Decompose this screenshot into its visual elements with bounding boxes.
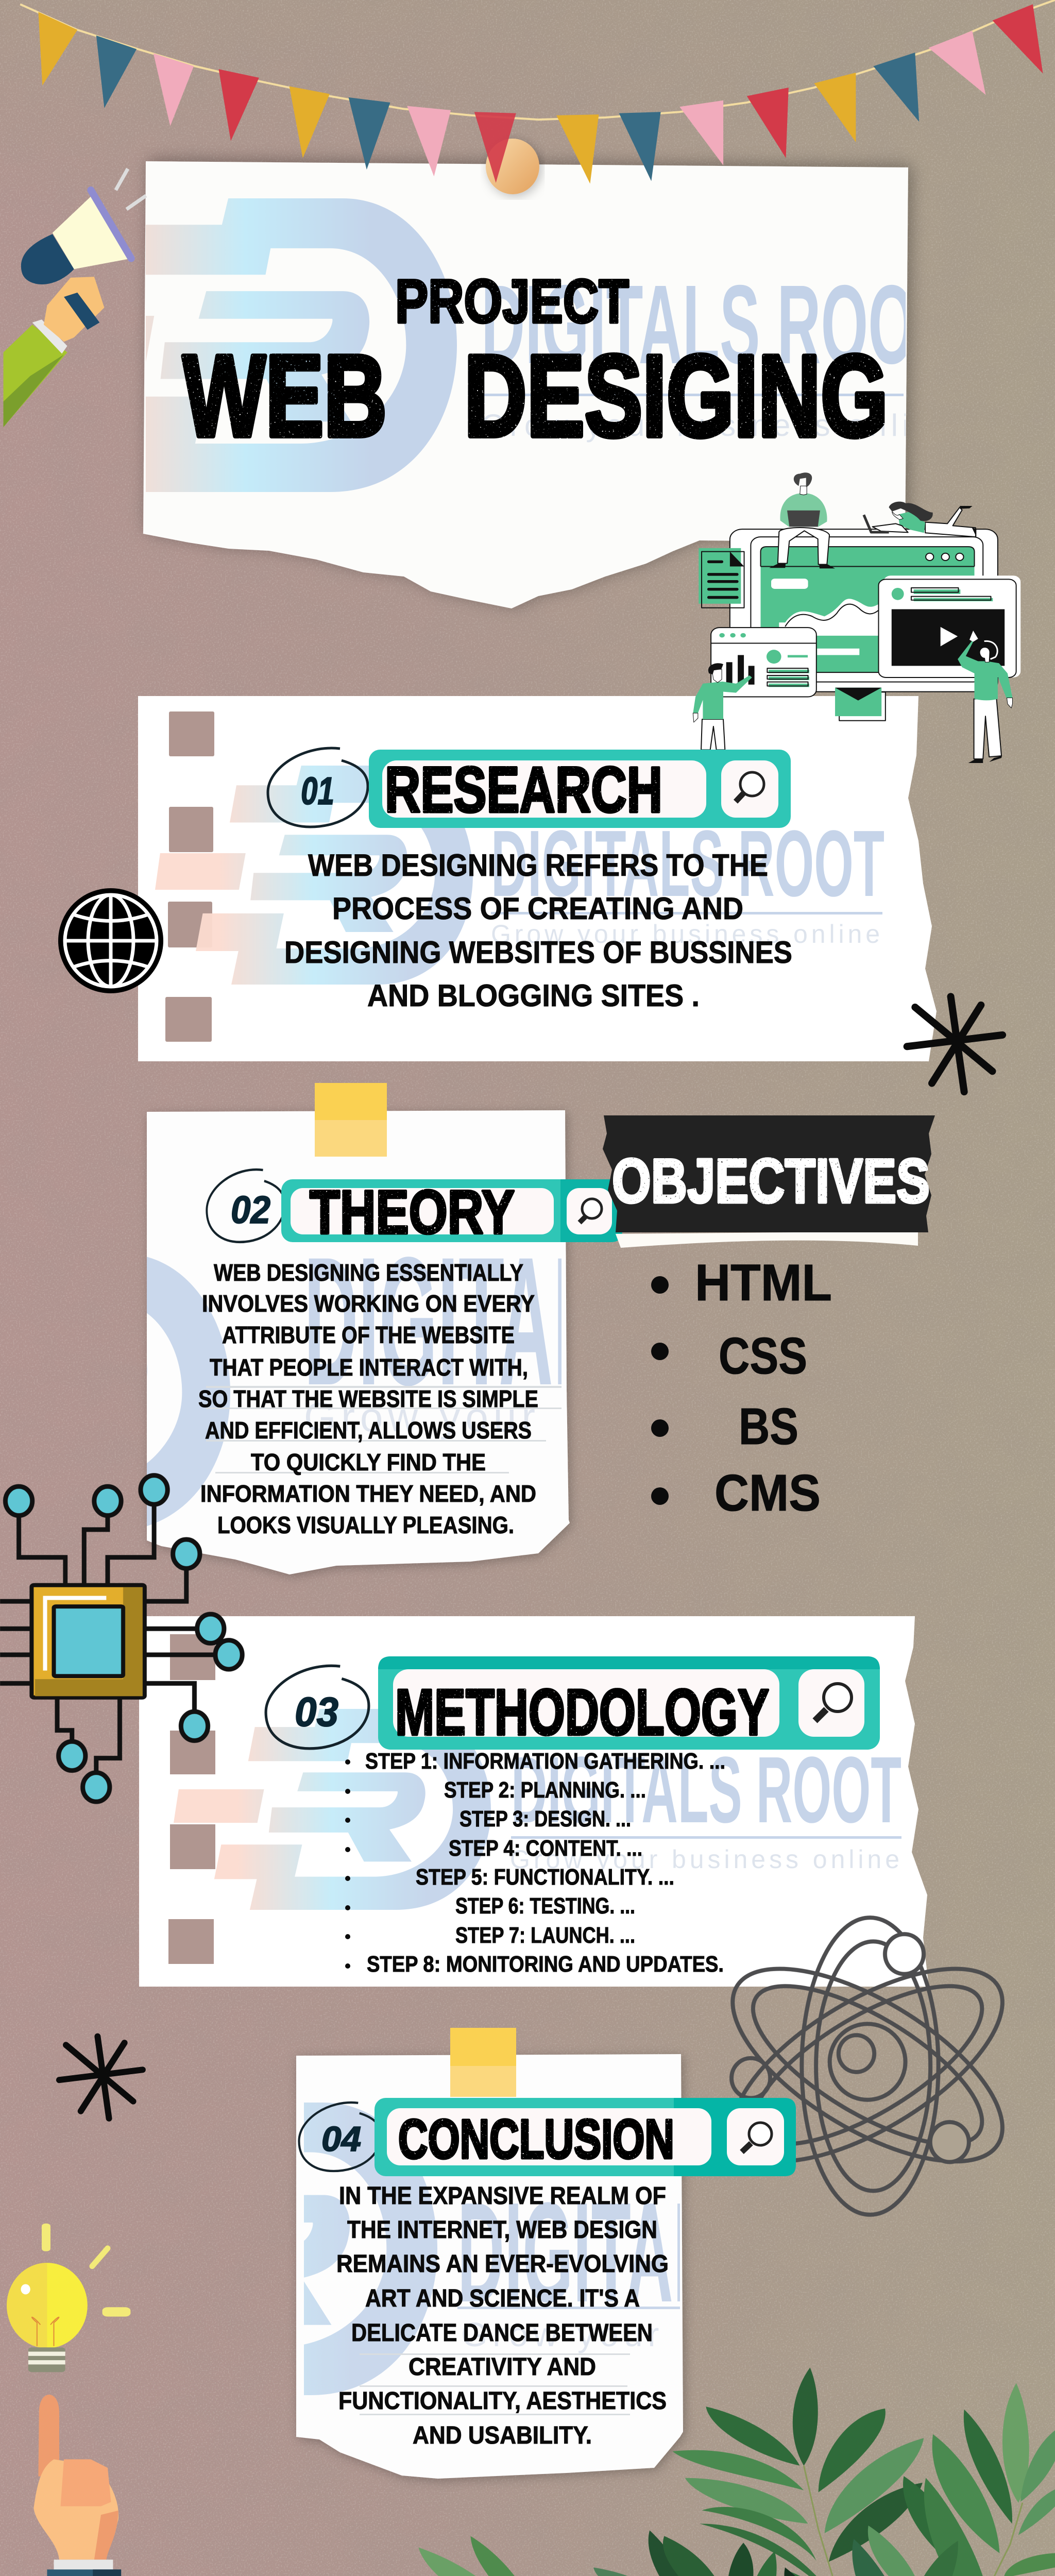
text: theory body: WEB DESIGNING ESSENTIALLY bbox=[214, 1259, 523, 1286]
heading text: objectives: OBJECTIVES bbox=[612, 1146, 930, 1216]
list: methodology steps: STEP 5: FUNCTIONALITY. ... bbox=[416, 1865, 674, 1890]
list: methodology steps: STEP 8: MONITORING AND UPDATES. bbox=[367, 1952, 724, 1977]
number: 04: 04 bbox=[321, 2120, 361, 2159]
panel: title paper bbox=[138, 150, 920, 613]
heading: theory bbox=[207, 1170, 622, 1247]
text: research body: PROCESS OF CREATING AND bbox=[332, 891, 743, 926]
title: web: WEB bbox=[183, 331, 387, 461]
search bar: theory bbox=[281, 1179, 622, 1242]
number: 02: 02 bbox=[231, 1188, 270, 1231]
text: research body: WEB DESIGNING REFERS TO THE bbox=[308, 848, 768, 883]
number circle: 01 bbox=[268, 748, 368, 827]
number circle: 04 bbox=[299, 2103, 381, 2171]
watermark: research logo: Grow your business online bbox=[491, 920, 880, 948]
text: theory body: LOOKS VISUALLY PLEASING. bbox=[217, 1512, 514, 1538]
text: theory body: TO QUICKLY FIND THE bbox=[251, 1449, 486, 1476]
text: theory body: SO THAT THE WEBSITE IS SIMPLE bbox=[198, 1385, 538, 1412]
heading text: research: RESEARCH bbox=[385, 754, 662, 826]
pin bbox=[486, 139, 539, 194]
text: research body bbox=[284, 848, 792, 1013]
text: conclusion body bbox=[336, 2182, 669, 2449]
list: methodology steps: STEP 4: CONTENT. ... bbox=[449, 1836, 642, 1861]
text: conclusion body: REMAINS AN EVER-EVOLVING bbox=[336, 2250, 669, 2278]
man right bbox=[958, 631, 1012, 763]
watermark: theory logo: Grow your bbox=[304, 1394, 540, 1440]
heading text: conclusion: CONCLUSION bbox=[398, 2108, 674, 2170]
text: theory body: THAT PEOPLE INTERACT WITH, bbox=[210, 1354, 528, 1381]
heading: methodology bbox=[266, 1656, 880, 1750]
list: objectives: HTML bbox=[695, 1254, 832, 1312]
icon: light bulb bbox=[7, 2224, 130, 2372]
text: conclusion body: IN THE EXPANSIVE REALM OF bbox=[339, 2182, 666, 2210]
text: conclusion body: FUNCTIONALITY, AESTHETICS bbox=[338, 2387, 667, 2415]
man left bbox=[693, 663, 752, 750]
list: methodology steps: STEP 7: LAUNCH. ... bbox=[455, 1923, 635, 1948]
list: methodology steps: STEP 1: INFORMATION GATHERING. ... bbox=[365, 1749, 725, 1774]
text: conclusion body: AND USABILITY. bbox=[413, 2422, 592, 2449]
search bar: methodology bbox=[378, 1656, 880, 1750]
list: methodology steps: STEP 3: DESIGN. ... bbox=[460, 1806, 631, 1832]
search bar: conclusion bbox=[375, 2098, 796, 2176]
text: theory body: AND EFFICIENT, ALLOWS USERS bbox=[205, 1417, 532, 1444]
panel: theory bbox=[0, 1110, 649, 1574]
number circle: 02 bbox=[207, 1170, 285, 1242]
banner: objectives bbox=[603, 1115, 935, 1248]
panel: methodology bbox=[139, 1616, 929, 1987]
chart window bbox=[711, 628, 816, 697]
icon: asterisk bottom bbox=[59, 2037, 143, 2119]
number circle: 03 bbox=[266, 1666, 369, 1749]
magnifier: methodology bbox=[815, 1684, 852, 1721]
watermark: theory logo bbox=[0, 1219, 649, 1532]
text: theory body: INVOLVES WORKING ON EVERY bbox=[202, 1290, 535, 1317]
text: conclusion body: CREATIVITY AND bbox=[409, 2353, 596, 2381]
person sitting bbox=[769, 472, 835, 568]
text: theory body: INFORMATION THEY NEED, AND bbox=[200, 1480, 536, 1507]
list: methodology steps bbox=[345, 1749, 725, 1977]
list: methodology steps: STEP 6: TESTING. ... bbox=[455, 1893, 635, 1919]
heading text: methodology: METHODOLOGY bbox=[395, 1676, 769, 1749]
icon: microchip bbox=[0, 1476, 242, 1802]
text: research body: AND BLOGGING SITES . bbox=[367, 978, 700, 1013]
title: project: PROJECT bbox=[395, 267, 629, 336]
number: 03: 03 bbox=[295, 1689, 338, 1735]
person lying bbox=[864, 502, 976, 537]
tape: conclusion bbox=[450, 2028, 516, 2097]
icon: plant leaves bbox=[402, 2367, 1055, 2576]
text: research body: DESIGNING WEBSITES OF BUSSINES bbox=[284, 935, 792, 970]
bunting bbox=[20, 0, 1055, 184]
magnifier: research bbox=[736, 772, 764, 802]
text: theory body: ATTRIBUTE OF THE WEBSITE bbox=[222, 1321, 515, 1348]
panel: research bbox=[138, 696, 937, 1061]
text: theory body bbox=[198, 1259, 538, 1538]
magnifier: conclusion bbox=[742, 2123, 772, 2152]
text: conclusion body: THE INTERNET, WEB DESIGN bbox=[347, 2216, 657, 2244]
icon: asterisk top bbox=[907, 996, 1002, 1092]
video window bbox=[878, 575, 1020, 677]
heading: research bbox=[268, 748, 791, 828]
number: 01: 01 bbox=[301, 769, 334, 812]
document bbox=[699, 548, 744, 608]
list: objectives: CSS bbox=[719, 1327, 807, 1385]
list: methodology steps: STEP 2: PLANNING. ... bbox=[444, 1777, 646, 1803]
heading text: theory: THEORY bbox=[310, 1178, 515, 1247]
heading: conclusion bbox=[299, 2098, 796, 2176]
watermark: title paper logo: Grow your business online bbox=[481, 408, 952, 443]
watermark: research logo bbox=[155, 766, 884, 985]
title: desiging: DESIGING bbox=[464, 331, 888, 461]
watermark: conclusion logo: Grow your bbox=[461, 2315, 664, 2353]
watermark: methodology logo: Grow your business online bbox=[510, 1845, 899, 1874]
watermark: conclusion logo bbox=[14, 2103, 756, 2395]
envelope bbox=[835, 688, 886, 721]
icon: web team illustration bbox=[693, 472, 1020, 763]
watermark: methodology logo bbox=[174, 1709, 901, 1910]
text: conclusion body: DELICATE DANCE BETWEEN bbox=[351, 2319, 653, 2347]
holes: film strip bbox=[168, 1634, 215, 1964]
panel: conclusion bbox=[14, 2054, 756, 2479]
watermark: title paper logo bbox=[33, 198, 952, 492]
tape: theory bbox=[315, 1083, 387, 1157]
magnifier: theory bbox=[580, 1199, 602, 1223]
icon: globe bbox=[58, 888, 163, 993]
text: conclusion body: ART AND SCIENCE. IT'S A bbox=[365, 2285, 640, 2312]
icon: pointing hand bbox=[33, 2395, 121, 2576]
list: objectives bbox=[651, 1254, 832, 1522]
icon: megaphone in hand bbox=[4, 168, 146, 427]
icon: atom bbox=[705, 1918, 1030, 2215]
list: objectives: CMS bbox=[714, 1464, 821, 1522]
search bar: research bbox=[369, 750, 791, 828]
list: objectives: BS bbox=[739, 1398, 798, 1455]
holes: film strip bbox=[165, 711, 214, 1042]
